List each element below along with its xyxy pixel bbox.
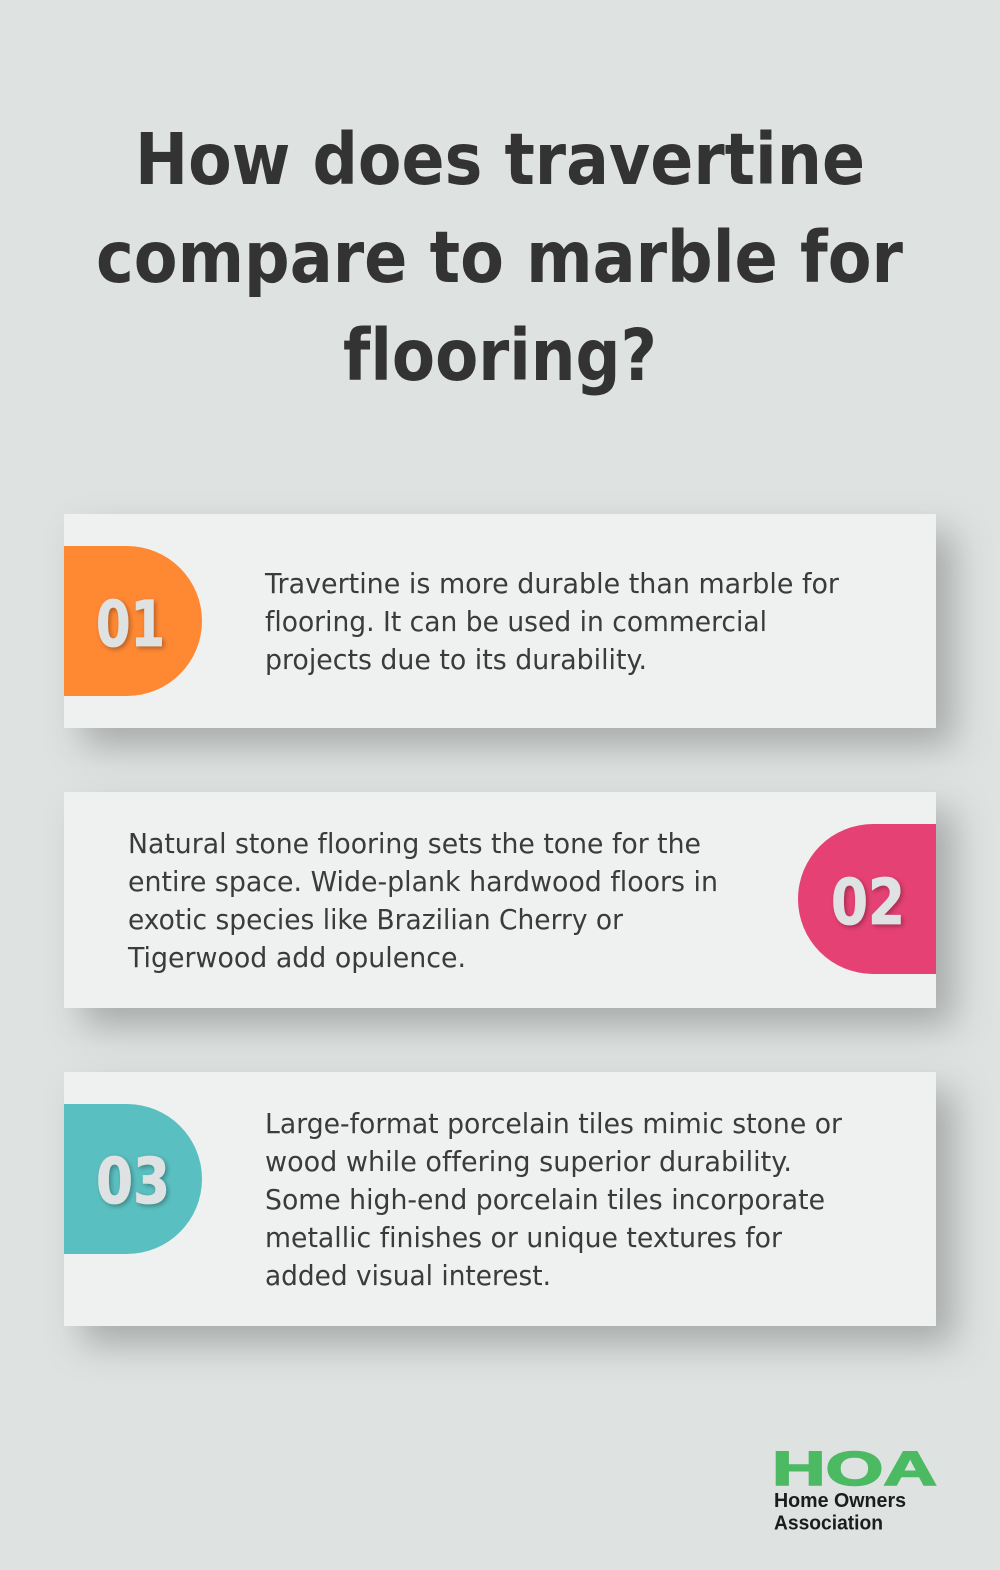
card background 01 xyxy=(64,514,936,728)
text: card 01: projects due to its durability. xyxy=(265,644,647,676)
text: card 03: metallic finishes or unique textures for xyxy=(265,1222,783,1254)
number badge 01 xyxy=(64,546,202,696)
number badge 01: 01 xyxy=(96,588,165,661)
text: card 03 xyxy=(265,1108,843,1292)
text: card 03: wood while offering superior durability. xyxy=(265,1146,792,1178)
text: card 03: Some high-end porcelain tiles incorporate xyxy=(265,1184,825,1216)
number badge 02 xyxy=(798,824,936,974)
logo: HOA Home Owners Association: Association xyxy=(774,1512,883,1534)
panel: card 02 xyxy=(64,792,936,1008)
text: card 02: entire space. Wide-plank hardwood floors in xyxy=(128,866,718,898)
text: card 03: added visual interest. xyxy=(265,1260,551,1292)
number badge 03: 03 xyxy=(96,1145,170,1218)
title xyxy=(96,118,904,397)
text: card 03: Large-format porcelain tiles mimic stone or xyxy=(265,1108,843,1140)
title: flooring? xyxy=(343,314,657,397)
text: card 02: exotic species like Brazilian Cherry or xyxy=(128,904,624,936)
text: card 01: flooring. It can be used in commercial xyxy=(265,606,767,638)
number badge 03 xyxy=(64,1104,202,1254)
title: How does travertine xyxy=(135,118,865,201)
title: compare to marble for xyxy=(96,216,904,299)
logo: HOA Home Owners Association xyxy=(772,1443,937,1534)
text: card 01: Travertine is more durable than marble for xyxy=(264,568,840,600)
text: card 01 xyxy=(264,568,840,676)
logo: HOA Home Owners Association: Home Owners xyxy=(774,1490,906,1512)
card background 03 xyxy=(64,1072,936,1326)
text: card 02: Tigerwood add opulence. xyxy=(127,942,466,974)
panel: card 01 xyxy=(64,514,936,728)
text: card 02: Natural stone flooring sets the tone for the xyxy=(128,828,701,860)
card background 02 xyxy=(64,792,936,1008)
logo: HOA Home Owners Association: HOA xyxy=(772,1443,937,1496)
text: card 02 xyxy=(127,828,718,974)
number badge 02: 02 xyxy=(831,866,905,939)
panel: card 03 xyxy=(64,1072,936,1326)
